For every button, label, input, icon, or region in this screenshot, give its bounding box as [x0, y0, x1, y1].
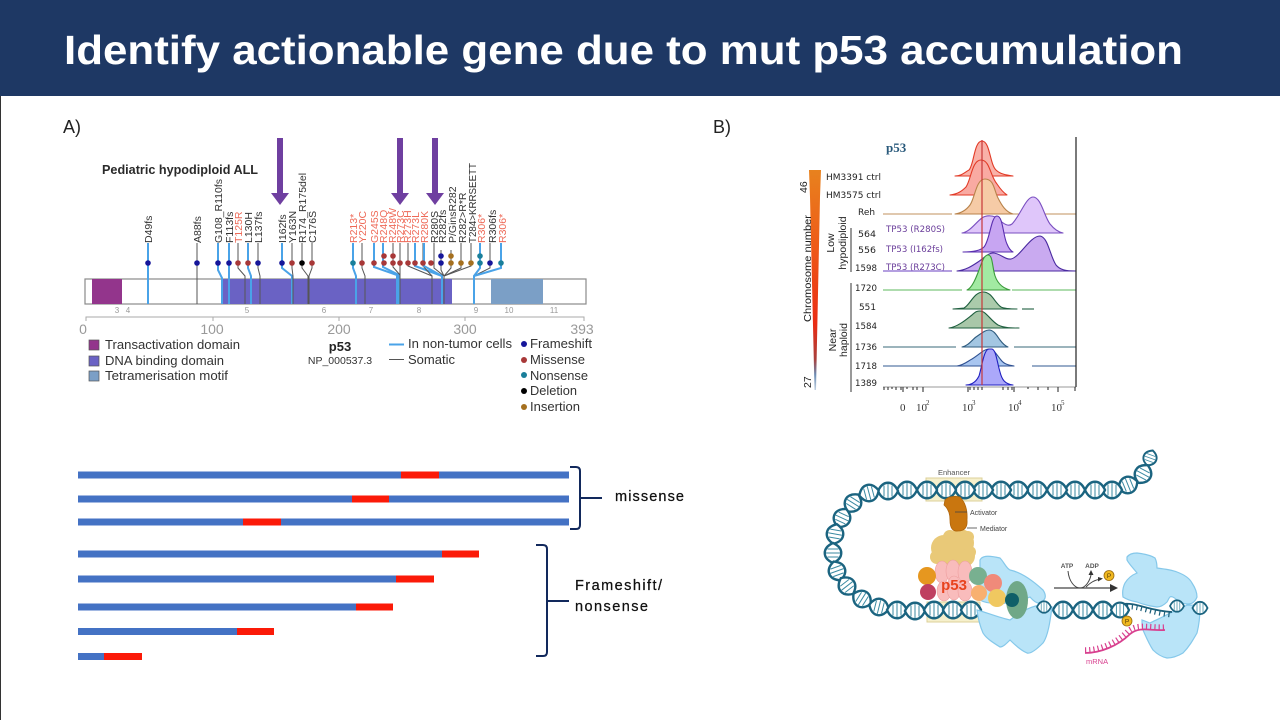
sample labels: 1598	[855, 264, 877, 274]
mutation type legend: Deletion	[530, 384, 577, 398]
amino-acid axis: 9	[474, 306, 479, 315]
mediator label: Mediator	[980, 526, 1008, 533]
panel: enhancer transcription diagram	[825, 448, 1208, 666]
mutation labels: R213*	[348, 214, 360, 243]
mutation labels: R282fs	[437, 210, 449, 243]
panel: p53 lollipop plot	[79, 138, 594, 414]
lollipop heads	[145, 253, 504, 266]
frameshift bracket	[536, 545, 569, 656]
mutation labels: R273L	[410, 212, 422, 243]
enhancer label: Enhancer	[938, 468, 971, 477]
mutation type legend	[521, 337, 593, 414]
log axis	[883, 387, 1076, 414]
activator	[944, 496, 967, 531]
log axis: 0	[900, 402, 906, 414]
amino-acid axis: 11	[550, 306, 559, 315]
mediator label	[967, 526, 1008, 533]
amino-acid axis: 100	[200, 321, 224, 337]
panel: protein truncation bars	[78, 467, 684, 660]
log axis: 10	[962, 402, 974, 414]
title banner	[0, 0, 1280, 96]
sample labels: HM3575 ctrl	[826, 191, 881, 201]
chromosome number scale: 27	[802, 376, 814, 388]
sample labels: 551	[859, 303, 876, 313]
amino-acid axis: 8	[417, 306, 422, 315]
line legend: Somatic	[408, 353, 455, 367]
ATP to ADP reaction arrow: ADP	[1085, 563, 1100, 570]
log axis: 3	[972, 399, 976, 407]
mutation labels: R280S	[429, 211, 441, 243]
mutation labels: Y163N	[287, 211, 299, 243]
mutation labels: G108_R110fs	[213, 179, 225, 243]
protein name: NP_000537.3	[308, 355, 372, 367]
log axis: 10	[916, 402, 928, 414]
lollipop stems	[148, 243, 501, 304]
mRNA	[1085, 626, 1165, 666]
domain legend	[89, 338, 240, 383]
mutation type legend: Frameshift	[530, 337, 593, 351]
sample labels: Reh	[858, 208, 875, 218]
mutation labels: R273C	[395, 210, 407, 243]
mutation labels	[143, 162, 509, 243]
mutation labels: R306fs	[487, 210, 499, 243]
mutation labels: P/GinsR282	[447, 186, 459, 243]
mutation labels: R248Q	[378, 210, 390, 243]
frameshift label: nonsense	[575, 599, 648, 615]
mutation labels: A88fs	[192, 216, 204, 243]
mutation labels: R273H	[402, 210, 414, 243]
TP53 mutation labels	[885, 225, 945, 273]
amino-acid axis: 10	[505, 306, 514, 315]
polymerase left	[977, 556, 1052, 653]
protein name	[308, 339, 372, 367]
ATP to ADP reaction arrow	[1054, 563, 1118, 592]
mutation labels: Y220C	[357, 210, 369, 243]
mutation labels: R280K	[419, 211, 431, 243]
mutation labels: I162fs	[277, 214, 289, 243]
frameshift label	[575, 578, 663, 615]
amino-acid axis: 0	[79, 321, 87, 337]
right axis line	[1075, 137, 1077, 387]
reference line	[981, 140, 983, 385]
TP53 mutation labels: TP53 (R280S)	[885, 225, 945, 235]
frameshift label: Frameshift/	[575, 578, 663, 594]
ATP to ADP reaction arrow: ATP	[1061, 563, 1074, 570]
arrow: R280S	[426, 138, 444, 205]
amino-acid axis: 5	[245, 306, 250, 315]
activator label: Activator	[970, 510, 998, 517]
group labels: haploid	[838, 323, 850, 357]
log axis: 4	[1018, 399, 1022, 407]
missense bracket	[570, 467, 602, 529]
p53 tetramer: p53	[941, 577, 967, 594]
sample labels: HM3391 ctrl	[826, 173, 881, 183]
amino-acid axis	[79, 306, 594, 337]
title banner: Identify actionable gene due to mut p53 accumulation	[64, 27, 1183, 73]
mediator	[930, 529, 976, 567]
domain legend: Transactivation domain	[105, 338, 240, 352]
sample labels: 556	[858, 246, 876, 256]
group brackets	[850, 228, 852, 392]
panel label B: B)	[713, 117, 731, 137]
mutation labels: R282>R*R	[457, 192, 469, 243]
phosphate on polymerase: P	[1125, 618, 1129, 626]
group labels	[825, 216, 850, 357]
sample labels	[826, 173, 881, 389]
log axis: 2	[926, 399, 930, 407]
polymerase right	[1123, 553, 1200, 658]
group labels: Near	[827, 328, 839, 351]
TP53 mutation labels: TP53 (R273C)	[885, 263, 945, 273]
amino-acid axis: 7	[369, 306, 374, 315]
domain legend: DNA binding domain	[105, 354, 224, 368]
heading: pediatric hypodiploid ALL: Pediatric hypodiploid ALL	[102, 163, 258, 177]
amino-acid axis: 3	[115, 306, 120, 315]
amino-acid axis: 393	[570, 321, 594, 337]
chromosome number scale: Chromosome number	[802, 214, 814, 322]
chromosome number scale: 46	[798, 181, 810, 193]
enhancer box	[926, 478, 982, 501]
panel: p53 flow cytometry ridge plot	[798, 137, 1076, 414]
arrow: I162fs	[271, 138, 289, 205]
amino-acid axis: 200	[327, 321, 351, 337]
sample labels: 1736	[855, 343, 877, 353]
chromosome number scale	[798, 170, 821, 390]
chart title: p53	[886, 140, 907, 155]
mutation labels: R306*	[476, 214, 488, 243]
activator label	[955, 510, 998, 517]
transcription factors	[918, 567, 1028, 619]
sample labels: 1584	[855, 322, 877, 332]
promoter box	[927, 602, 980, 622]
sample labels: 1718	[855, 362, 877, 372]
mutation labels: R174_R175del	[297, 173, 309, 243]
p53 tetramer	[935, 560, 972, 601]
arrow: R273C	[391, 138, 409, 205]
phosphate on polymerase	[1122, 616, 1132, 626]
mutation labels: C176S	[307, 211, 319, 243]
log axis: 10	[1008, 402, 1020, 414]
TP53 mutation labels: TP53 (I162fs)	[885, 245, 943, 255]
line legend: In non-tumor cells	[408, 337, 512, 351]
mutation type legend: Insertion	[530, 400, 580, 414]
mutation labels: G245S	[369, 210, 381, 243]
DNA loop	[825, 448, 1159, 619]
frameshift and nonsense bars	[78, 550, 479, 660]
log axis: 5	[1061, 399, 1065, 407]
protein name: p53	[329, 339, 351, 354]
sample labels: 564	[858, 230, 876, 240]
line legend	[389, 337, 512, 367]
sample labels: 1720	[855, 284, 877, 294]
mutation labels: R248W	[387, 208, 399, 243]
mutation labels: L137fs	[253, 211, 265, 243]
mutation type legend: Nonsense	[530, 369, 588, 383]
mRNA: mRNA	[1086, 657, 1108, 666]
mutation labels: D49fs	[143, 216, 155, 243]
mutation type legend: Missense	[530, 353, 585, 367]
group labels: hypodiploid	[837, 216, 849, 270]
missense label: missense	[615, 489, 684, 505]
transcription bubble strand	[1123, 604, 1172, 615]
group labels: Low	[825, 233, 837, 253]
amino-acid axis: 6	[322, 306, 327, 315]
DNA between polymerase halves	[1037, 600, 1208, 614]
mutation labels: T125R	[233, 211, 245, 243]
amino-acid axis: 4	[126, 306, 131, 315]
mutation labels: R306*	[497, 214, 509, 243]
ridge histograms	[883, 141, 1076, 385]
mutation labels: T284>KRRSEETT	[467, 162, 479, 243]
mutation labels: L130H	[243, 212, 255, 243]
protein track	[85, 279, 586, 304]
panel label A: A)	[63, 117, 81, 137]
ATP to ADP reaction arrow: P	[1107, 573, 1111, 580]
missense bars	[78, 472, 569, 526]
log axis: 10	[1051, 402, 1062, 414]
amino-acid axis: 300	[453, 321, 477, 337]
mutation labels: F113fs	[224, 212, 236, 243]
domain legend: Tetramerisation motif	[105, 369, 229, 383]
sample labels: 1389	[855, 379, 877, 389]
